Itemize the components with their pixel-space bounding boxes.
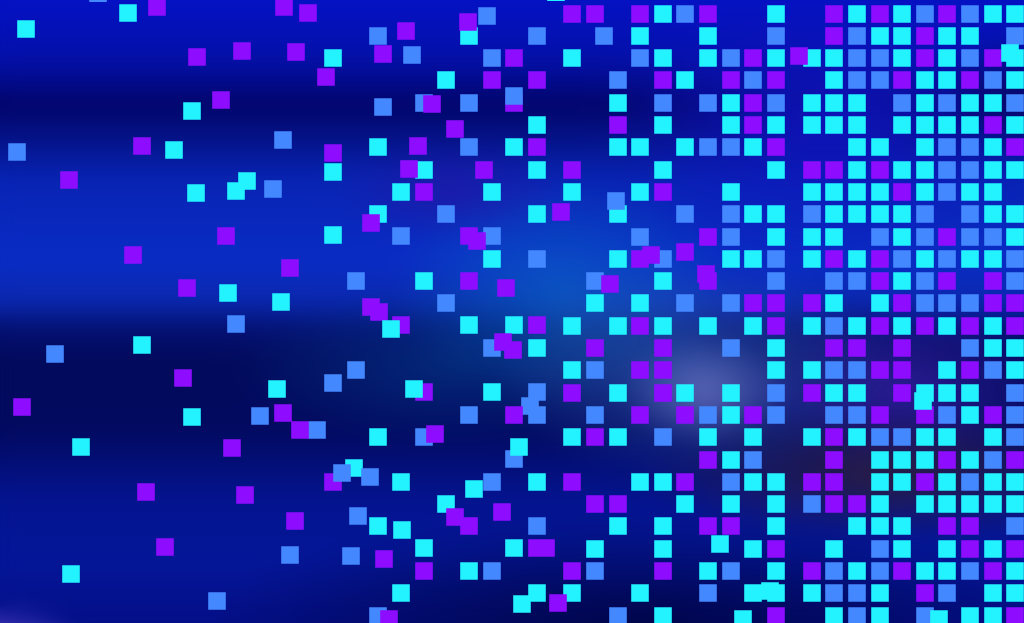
scattered squares: blue xyxy=(17,16,616,601)
overlapping squares: blue top layer xyxy=(342,96,514,477)
squares cut by the bottom edge: cyan xyxy=(734,610,948,623)
scattered squares: cyan xyxy=(26,13,537,604)
scattered squares: purple xyxy=(22,7,799,603)
squares cut by the bottom edge: purple xyxy=(380,610,398,623)
overlapping squares: cyan top layer xyxy=(391,53,1010,591)
squares cut by the top edge: blue xyxy=(89,0,107,2)
bottom row squares cut by the edge: cyan xyxy=(654,607,1002,623)
bottom row squares cut by the edge: blue xyxy=(369,607,934,623)
grid squares: purple xyxy=(572,14,1015,593)
grid squares: cyan xyxy=(572,14,1015,593)
grid squares: blue xyxy=(595,14,1015,593)
squares cut by the top edge: cyan xyxy=(547,0,565,2)
bottom row squares cut by the edge: purple xyxy=(767,607,1024,623)
